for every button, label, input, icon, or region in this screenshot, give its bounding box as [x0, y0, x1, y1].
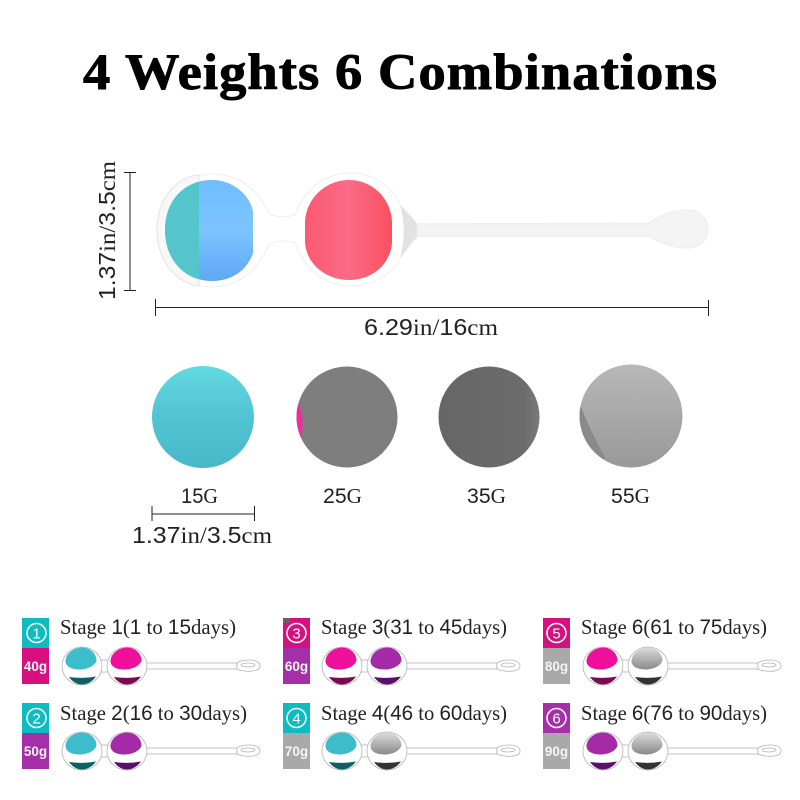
- stage 1 badge: 40g: [24, 659, 47, 674]
- ball: 15G: 15G: [181, 484, 218, 508]
- stage 5 badge: [543, 618, 570, 684]
- stage 5: [543, 615, 781, 685]
- stage 3 toy: [322, 647, 520, 685]
- length dimension: 6.29in/16cm: [364, 314, 498, 340]
- stage 6 toy: [583, 732, 781, 770]
- stage 1: Stage 1(1 to 15days): [60, 615, 236, 639]
- stage 6 badge: 6: [552, 710, 561, 728]
- stage 2 badge: 50g: [24, 744, 47, 759]
- stage 5 toy: [583, 647, 781, 685]
- stage 2: Stage 2(16 to 30days): [60, 701, 247, 725]
- stage 3: Stage 3(31 to 45days): [321, 615, 507, 639]
- stage 4 badge: [283, 703, 310, 769]
- teal overlay: [165, 182, 199, 280]
- stage 3 badge: 60g: [285, 659, 308, 674]
- ball: 15G: [152, 366, 254, 508]
- stage 2 badge: [22, 703, 49, 769]
- stage 1 badge: [22, 618, 49, 684]
- toy body: [157, 173, 708, 287]
- stage 5: Stage 6(61 to 75days): [581, 615, 767, 639]
- ball: 35G: [438, 366, 540, 508]
- stage 6: Stage 6(76 to 90days): [581, 701, 767, 725]
- height dimension: 1.37in/3.5cm: [94, 161, 120, 300]
- stage 6 badge: 90g: [545, 744, 568, 759]
- stage 4: Stage 4(46 to 60days): [321, 701, 507, 725]
- stage 2: [22, 701, 260, 770]
- stage 2 badge: 2: [32, 710, 41, 728]
- stage 4 badge: 70g: [285, 744, 308, 759]
- stage 6: [543, 701, 781, 770]
- ball diameter dimension: 1.37in/3.5cm: [132, 522, 272, 548]
- ball: 35G: 35G: [467, 484, 506, 508]
- stage 4 badge: 4: [292, 710, 301, 728]
- stage 1 badge: 1: [32, 626, 41, 642]
- ball: 25G: 25G: [323, 484, 362, 508]
- ball: 55G: [580, 364, 682, 503]
- stage 1: [22, 615, 260, 685]
- stage 3 badge: 3: [292, 626, 301, 642]
- stage 2 toy: [62, 732, 260, 770]
- stage 4 toy: [322, 732, 520, 770]
- blue ball: [165, 180, 253, 281]
- red ball: [305, 180, 392, 280]
- length dimension: [156, 299, 708, 340]
- stage 3 badge: [283, 618, 310, 684]
- product illustration: [157, 173, 708, 287]
- stage 3: [283, 615, 520, 685]
- ball: 55G: 55G: [611, 484, 650, 508]
- stage 5 badge: 80g: [545, 659, 568, 674]
- stage 6 badge: [543, 703, 570, 769]
- title: 4 Weights 6 Combinations: [83, 45, 718, 101]
- stage 4: [283, 701, 520, 770]
- height dimension: [94, 161, 136, 300]
- stage 1 toy: [62, 647, 260, 685]
- stage 5 badge: 5: [552, 626, 561, 642]
- ball diameter dimension: [132, 506, 272, 548]
- ball: 25G: [296, 366, 398, 508]
